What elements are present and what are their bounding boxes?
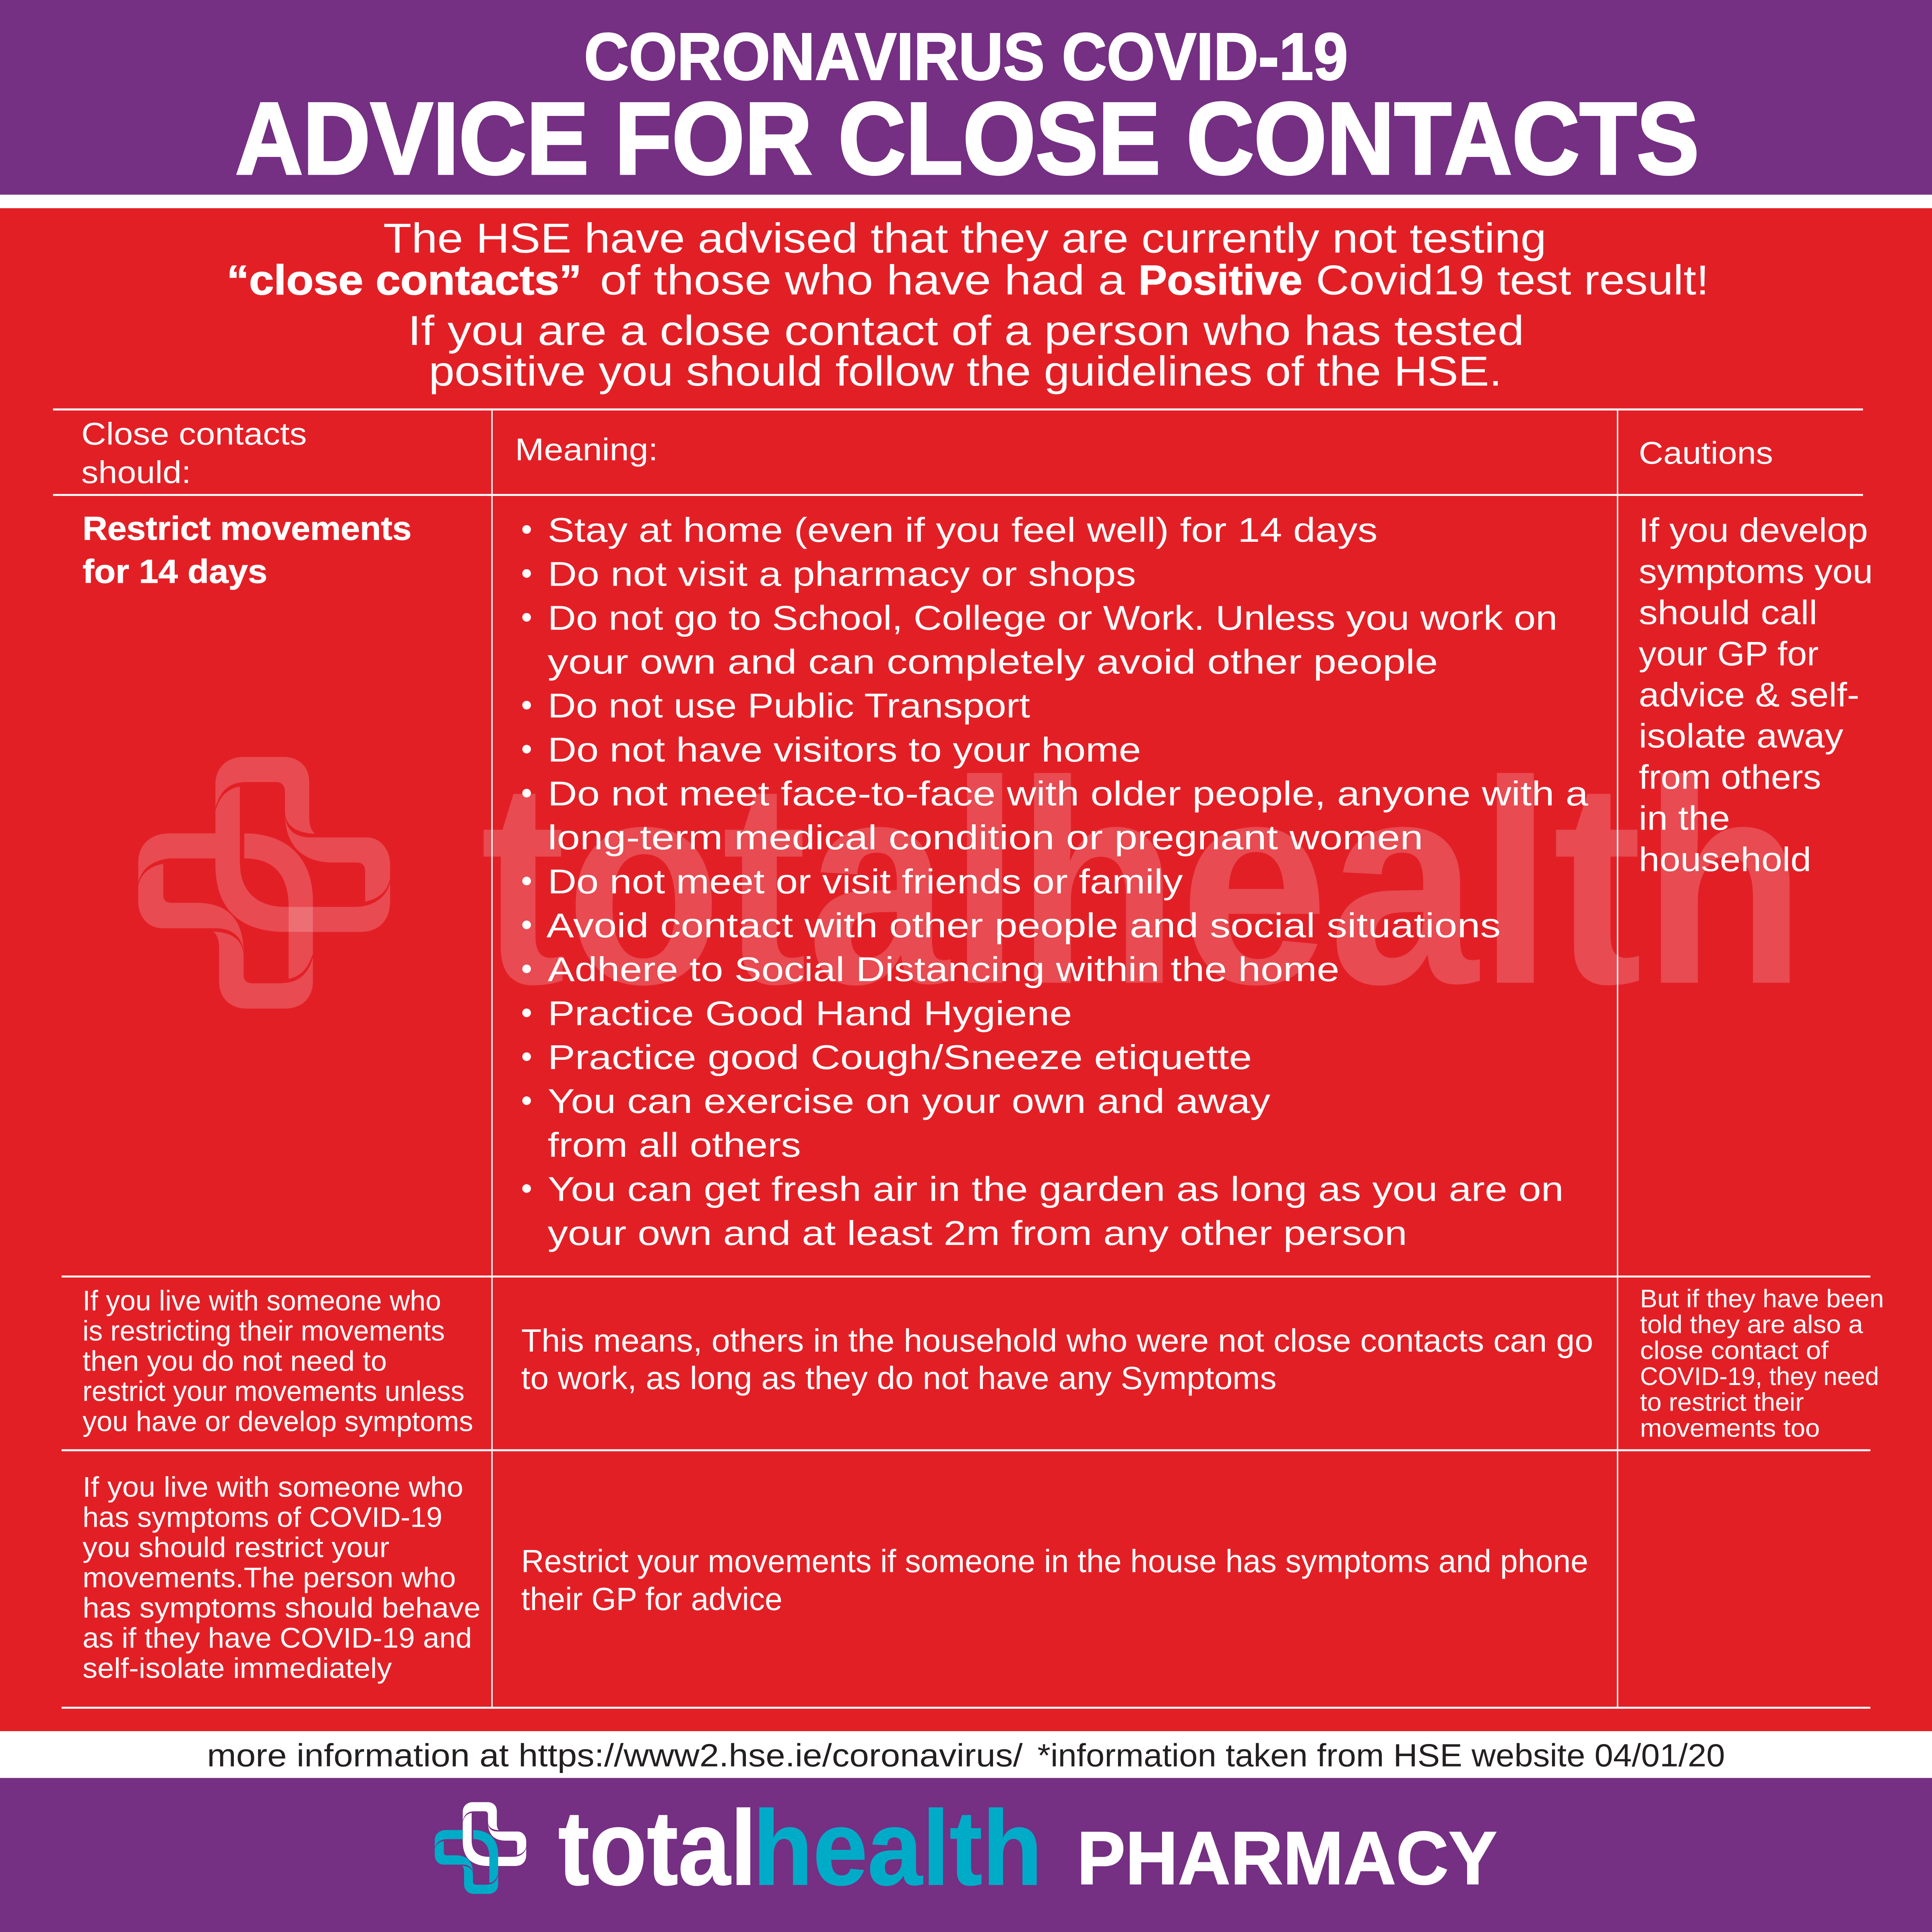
header band (0, 0, 1932, 196)
row 2 action: is restricting their movements (83, 1315, 445, 1347)
row 2 action: restrict your movements unless (83, 1375, 464, 1407)
row 2 caution: to restrict their (1640, 1388, 1804, 1416)
row 1 meaning bullet list: long-term medical condition or pregnant women (548, 818, 1423, 857)
footer band with logo (0, 1778, 1932, 1932)
row 1 meaning bullet list: Avoid contact with other people and social situations (547, 906, 1501, 945)
header: close contacts should (81, 416, 307, 490)
wordmark: totalhealth (558, 1789, 1042, 1907)
row 2 action: then you do not need to (83, 1345, 387, 1377)
row 3 meaning: their GP for advice (521, 1581, 782, 1617)
watermark: totalhealth wordmark: total (481, 721, 1020, 1044)
row 2: living with someone restricting movements (83, 1285, 1884, 1442)
source strip: *information taken from HSE website 04/01/20 (1038, 1738, 1725, 1773)
header: cautions: Cautions (1639, 435, 1773, 471)
header: close contacts should: Close contacts (81, 416, 307, 451)
row 2 meaning: to work, as long as they do not have any Symptoms (521, 1360, 1276, 1396)
row 1 caution: isolate away (1639, 717, 1843, 755)
row 1 meaning bullet list: Do not use Public Transport (548, 687, 1030, 725)
row 1 action: Restrict movements (83, 510, 411, 547)
wordmark: totalhealth: health (753, 1789, 1042, 1907)
row 1 meaning bullet list: Do not go to School, College or Work. Unless you work on (548, 599, 1557, 637)
bullet markers (522, 525, 531, 1193)
row 1 meaning bullet list: your own and can completely avoid other people (548, 643, 1438, 681)
row 1 action (83, 510, 411, 590)
icon: totalhealth cross logo (435, 1802, 526, 1894)
intro text block: Covid19 test result! (1316, 257, 1709, 304)
row 2 caution (1640, 1285, 1884, 1442)
row 1 meaning bullet list: your own and at least 2m from any other person (548, 1214, 1407, 1253)
watermark: totalhealth wordmark: health (1015, 721, 1806, 1044)
row 1 meaning bullet list: from all others (548, 1126, 801, 1164)
row 3 action: has symptoms should behave (83, 1591, 481, 1623)
row 1 caution: household (1639, 840, 1811, 878)
intro text block (227, 215, 1709, 395)
row 2 caution: told they are also a (1640, 1311, 1863, 1339)
row 1 caution: from others (1639, 758, 1821, 796)
row 1 action: for 14 days (83, 553, 267, 590)
row 1 caution: should call (1639, 594, 1817, 632)
intro text block: positive you should follow the guidelines of the HSE. (429, 348, 1502, 395)
row 3 action (83, 1471, 481, 1684)
row 3 action: self-isolate immediately (83, 1652, 392, 1684)
header: meaning: Meaning: (515, 432, 658, 467)
row 2 action: you have or develop symptoms (83, 1406, 473, 1437)
row 1 caution: symptoms you (1639, 552, 1873, 590)
title: advice for close contacts: ADVICE FOR CLOSE CONTACTS (235, 81, 1699, 196)
wordmark: pharmacy: PHARMACY (1077, 1816, 1497, 1900)
intro text block: If you are a close contact of a person who has tested (408, 308, 1524, 354)
row 1 meaning bullet list: Adhere to Social Distancing within the home (548, 950, 1340, 989)
wordmark: totalhealth: total (558, 1789, 757, 1907)
row 1 meaning bullet list: You can get fresh air in the garden as long as you are on (548, 1170, 1564, 1208)
row 1 meaning bullet list: Practice Good Hand Hygiene (548, 994, 1072, 1033)
intro text block: The HSE have advised that they are currently not testing (383, 215, 1546, 262)
row 2 meaning: This means, others in the household who were not close contacts can go (521, 1323, 1593, 1358)
row 3 action: movements.The person who (83, 1561, 456, 1593)
intro text block: of those who have had a (600, 257, 1125, 304)
watermark: totalhealth wordmark (481, 721, 1806, 1044)
row 3 action: has symptoms of COVID-19 (83, 1501, 442, 1533)
row 2 action (83, 1285, 473, 1437)
row 3 action: you should restrict your (83, 1531, 389, 1563)
row 1 meaning bullet list: Stay at home (even if you feel well) for 14 days (548, 511, 1377, 549)
row 3 action: If you live with someone who (83, 1471, 463, 1503)
source strip: more information at https://www2.hse.ie/coronavirus/ (207, 1738, 1023, 1773)
row 3 meaning (521, 1543, 1588, 1617)
row 1 meaning bullet list: You can exercise on your own and away (548, 1082, 1270, 1121)
title: coronavirus covid-19: CORONAVIRUS COVID-19 (584, 19, 1348, 94)
row 3 action: as if they have COVID-19 and (83, 1622, 472, 1653)
row 1 caution: in the (1639, 799, 1730, 837)
table header row (81, 416, 1773, 490)
row 1 meaning bullet list: Practice good Cough/Sneeze etiquette (548, 1038, 1252, 1077)
header: close contacts should: should: (81, 454, 191, 490)
row 2 action: If you live with someone who (83, 1285, 441, 1317)
row 1 meaning bullet list (522, 511, 1588, 1253)
row 1: restrict movements (83, 510, 1873, 1253)
source strip (0, 1731, 1932, 1778)
table grid lines (53, 409, 1870, 1708)
row 2 caution: movements too (1640, 1414, 1820, 1442)
row 3 meaning: Restrict your movements if someone in the house has symptoms and phone (521, 1543, 1588, 1579)
row 1 caution: If you develop (1639, 511, 1868, 549)
row 1 meaning bullet list: Do not have visitors to your home (548, 731, 1141, 769)
white divider band (0, 195, 1932, 208)
row 2 caution: But if they have been (1640, 1285, 1884, 1313)
row 1 caution: your GP for (1639, 635, 1818, 673)
row 1 meaning bullet list: Do not meet or visit friends or family (548, 862, 1183, 901)
row 2 meaning (521, 1323, 1593, 1396)
red main panel (0, 208, 1932, 1731)
intro text block: Positive (1139, 257, 1302, 304)
row 1 caution: advice & self- (1639, 676, 1859, 714)
row 3: living with someone with symptoms (83, 1471, 1588, 1684)
row 1 caution (1639, 511, 1873, 878)
row 2 caution: COVID-19, they need (1640, 1362, 1879, 1391)
row 1 meaning bullet list: Do not meet face-to-face with older people, anyone with a (548, 774, 1588, 813)
row 1 meaning bullet list: Do not visit a pharmacy or shops (548, 555, 1136, 593)
row 2 caution: close contact of (1640, 1337, 1829, 1365)
intro text block: “close contacts” (227, 257, 582, 304)
watermark: cross logo (138, 757, 390, 1009)
